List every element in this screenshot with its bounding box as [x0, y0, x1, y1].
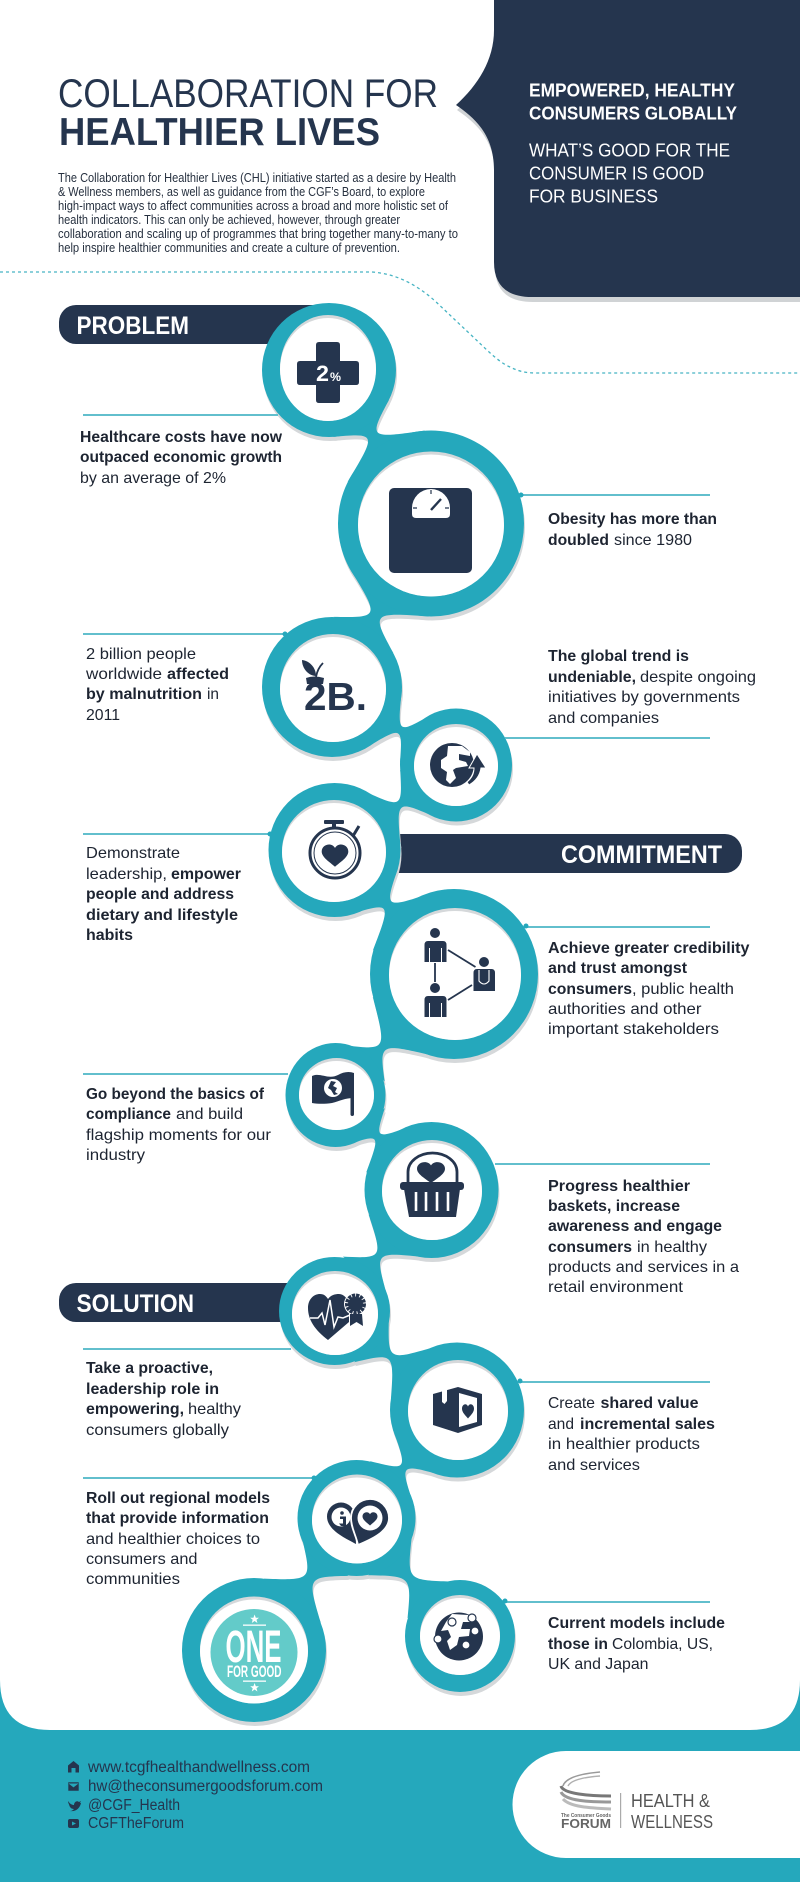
panel: headline callout: WHAT’S GOOD FOR THE: [529, 140, 730, 160]
panel: headline callout: CONSUMERS GLOBALLY: [529, 102, 737, 124]
text: credibility and trust: Achieve greater credibility: [548, 940, 750, 957]
text: healthier baskets: retail environment: [548, 1279, 684, 1296]
node: globe with network points: [405, 1580, 515, 1692]
title: [58, 72, 438, 154]
text: global trend: despite ongoing: [640, 669, 756, 686]
intro paragraph: [58, 170, 458, 255]
node: one for good badge: [182, 1578, 326, 1722]
text: credibility and trust: and trust amongst: [548, 960, 688, 977]
heading: solution: SOLUTION: [76, 1290, 194, 1318]
twitter handle: @CGF_Health: [88, 1797, 180, 1814]
text: global trend: undeniable,: [548, 669, 636, 686]
text: proactive leadership: [83, 1349, 291, 1439]
text: proactive leadership: Take a proactive,: [86, 1360, 213, 1377]
text: healthier baskets: awareness and engage: [548, 1218, 722, 1235]
logo text: the consumer goods: The Consumer Goods: [561, 1813, 611, 1819]
node: globe with upward arrow: [400, 708, 512, 822]
logo text: health: HEALTH &: [631, 1791, 710, 1811]
text: beyond compliance: [83, 1074, 288, 1164]
email: hw@theconsumergoodsforum.com: [88, 1778, 323, 1795]
text: current models: Current models include: [548, 1615, 725, 1632]
icon: forum swoosh: [561, 1772, 611, 1809]
text: healthcare costs: Healthcare costs have now: [80, 429, 283, 446]
text: regional models: that provide information: [86, 1510, 269, 1527]
text: beyond compliance: flagship moments for our: [86, 1127, 272, 1144]
node: box with heart: [390, 1342, 524, 1478]
node: one for good badge: FOR GOOD: [227, 1663, 282, 1681]
text: regional models: Roll out regional models: [86, 1490, 270, 1507]
text: malnutrition: worldwide: [85, 666, 162, 683]
text: proactive leadership: consumers globally: [86, 1422, 229, 1439]
text: demonstrate leadership: habits: [86, 927, 133, 944]
node: healthcare cross 2%: %: [330, 370, 341, 384]
text: global trend: [505, 648, 756, 738]
text: global trend: and companies: [548, 710, 659, 727]
text: malnutrition: in: [207, 686, 219, 703]
text: healthcare costs: by an average of 2%: [80, 470, 226, 487]
text: healthier baskets: Progress healthier: [548, 1178, 690, 1195]
node: flag with globe: [286, 1043, 386, 1147]
panel: headline callout: [456, 0, 800, 302]
text: malnutrition: 2 billion people: [86, 646, 196, 663]
text: demonstrate leadership: leadership,: [86, 866, 167, 883]
text: beyond compliance: industry: [86, 1147, 145, 1164]
heading: commitment: COMMITMENT: [561, 841, 722, 869]
icon: mail: [68, 1782, 79, 1791]
footer logo panel: [512, 1751, 800, 1858]
chain connectors: [264, 393, 450, 1623]
logo text: forum: FORUM: [561, 1817, 611, 1831]
node: shopping basket: [364, 1122, 498, 1258]
text: shared value: [518, 1378, 715, 1474]
text: healthcare costs: outpaced economic growth: [80, 449, 282, 466]
text: demonstrate leadership: people and address: [86, 886, 234, 903]
panel: headline callout: EMPOWERED, HEALTHY: [529, 80, 735, 100]
text: malnutrition: [83, 632, 288, 724]
node: one for good badge: ONE: [226, 1621, 282, 1672]
text: healthier baskets: in healthy: [637, 1239, 707, 1256]
heading: commitment: [380, 834, 742, 873]
text: demonstrate leadership: [83, 832, 272, 944]
text: obesity: [518, 492, 717, 549]
text: malnutrition: by malnutrition: [86, 686, 202, 703]
text: malnutrition: 2011: [86, 707, 120, 724]
text: global trend: The global trend is: [548, 648, 689, 665]
website: www.tcgfhealthandwellness.com: [87, 1759, 310, 1776]
text: regional models: [83, 1476, 316, 1588]
node: location pins: [298, 1460, 416, 1576]
node: 2 billion apple: 2B.: [304, 676, 367, 719]
text: current models: Colombia, US,: [612, 1636, 713, 1653]
text: regional models: consumers and: [86, 1551, 198, 1568]
intro paragraph: health indicators. This can only be achieved, however, through greater: [58, 212, 401, 227]
text: healthier baskets: products and services in a: [548, 1259, 739, 1276]
text: current models: [502, 1598, 725, 1673]
node: weighing scale: [338, 430, 524, 616]
text: obesity: Obesity has more than: [548, 511, 717, 528]
text: regional models: communities: [86, 1571, 180, 1588]
text: obesity: since 1980: [614, 532, 692, 549]
node: connected people: [370, 889, 538, 1059]
text: healthier baskets: baskets, increase: [548, 1198, 680, 1215]
text: obesity: doubled: [548, 532, 609, 549]
node: heart with pulse and award: [279, 1257, 390, 1365]
icon: video: [68, 1819, 79, 1828]
text: credibility and trust: , public health: [632, 981, 734, 998]
text: beyond compliance: compliance: [86, 1106, 171, 1123]
intro paragraph: The Collaboration for Healthier Lives (CHL) initiative started as a desire by Health: [58, 170, 456, 185]
text: credibility and trust: important stakeholders: [548, 1021, 719, 1038]
text: global trend: initiatives by governments: [548, 689, 740, 706]
text: regional models: and healthier choices to: [86, 1531, 260, 1548]
chain drop shadow: [183, 307, 539, 1726]
text: credibility and trust: [524, 924, 750, 1038]
heading: problem: PROBLEM: [76, 312, 189, 340]
text: credibility and trust: authorities and other: [548, 1001, 702, 1018]
text: current models: those in: [548, 1636, 608, 1653]
text: current models: UK and Japan: [548, 1656, 648, 1673]
text: demonstrate leadership: Demonstrate: [86, 845, 180, 862]
node: healthcare cross 2%: 2: [316, 361, 329, 386]
node: 2 billion apple: [262, 617, 402, 757]
text: beyond compliance: and build: [176, 1106, 243, 1123]
heading: problem: [59, 305, 349, 344]
footer contact list: [68, 1759, 323, 1832]
text: proactive leadership: healthy: [188, 1401, 241, 1418]
intro paragraph: collaboration and scaling up of programmes that bring together many-to-many to: [58, 226, 458, 241]
panel: headline callout: CONSUMER IS GOOD: [529, 162, 704, 184]
video channel: CGFTheForum: [88, 1815, 184, 1832]
node: stopwatch with heart: [268, 783, 400, 917]
text: shared value: and services: [548, 1457, 640, 1474]
text: shared value: Create: [548, 1395, 595, 1412]
text: shared value: incremental sales: [580, 1416, 715, 1433]
text: proactive leadership: empowering,: [86, 1401, 184, 1418]
title: COLLABORATION FOR: [58, 72, 438, 116]
text: demonstrate leadership: dietary and lifestyle: [86, 907, 238, 924]
intro paragraph: help inspire healthier communities and create a culture of prevention.: [58, 240, 400, 255]
text: shared value: shared value: [600, 1395, 699, 1412]
text: shared value: and: [548, 1416, 574, 1433]
dashed route line: [0, 272, 800, 373]
title: HEALTHIER LIVES: [59, 111, 380, 154]
panel: headline callout: FOR BUSINESS: [529, 186, 658, 206]
text: proactive leadership: leadership role in: [86, 1381, 219, 1398]
text: beyond compliance: Go beyond the basics of: [86, 1086, 265, 1103]
text: credibility and trust: consumers: [548, 981, 632, 998]
icon: twitter: [68, 1801, 81, 1811]
intro paragraph: & Wellness members, as well as guidance from the CGF’s Board, to explore: [58, 184, 425, 199]
text: shared value: in healthier products: [548, 1436, 700, 1453]
heading: solution: [59, 1283, 309, 1322]
node: healthcare cross 2%: [262, 303, 396, 437]
footer background: [0, 1680, 800, 1882]
logo text: wellness: WELLNESS: [631, 1812, 713, 1832]
icon: home: [68, 1761, 79, 1772]
text: healthier baskets: [495, 1164, 739, 1296]
text: healthcare costs: [80, 415, 283, 487]
text: healthier baskets: consumers: [548, 1239, 632, 1256]
intro paragraph: high-impact ways to affect communities across a broad and more holistic set of: [58, 198, 448, 213]
text: demonstrate leadership: empower: [171, 866, 241, 883]
text: malnutrition: affected: [167, 666, 229, 683]
